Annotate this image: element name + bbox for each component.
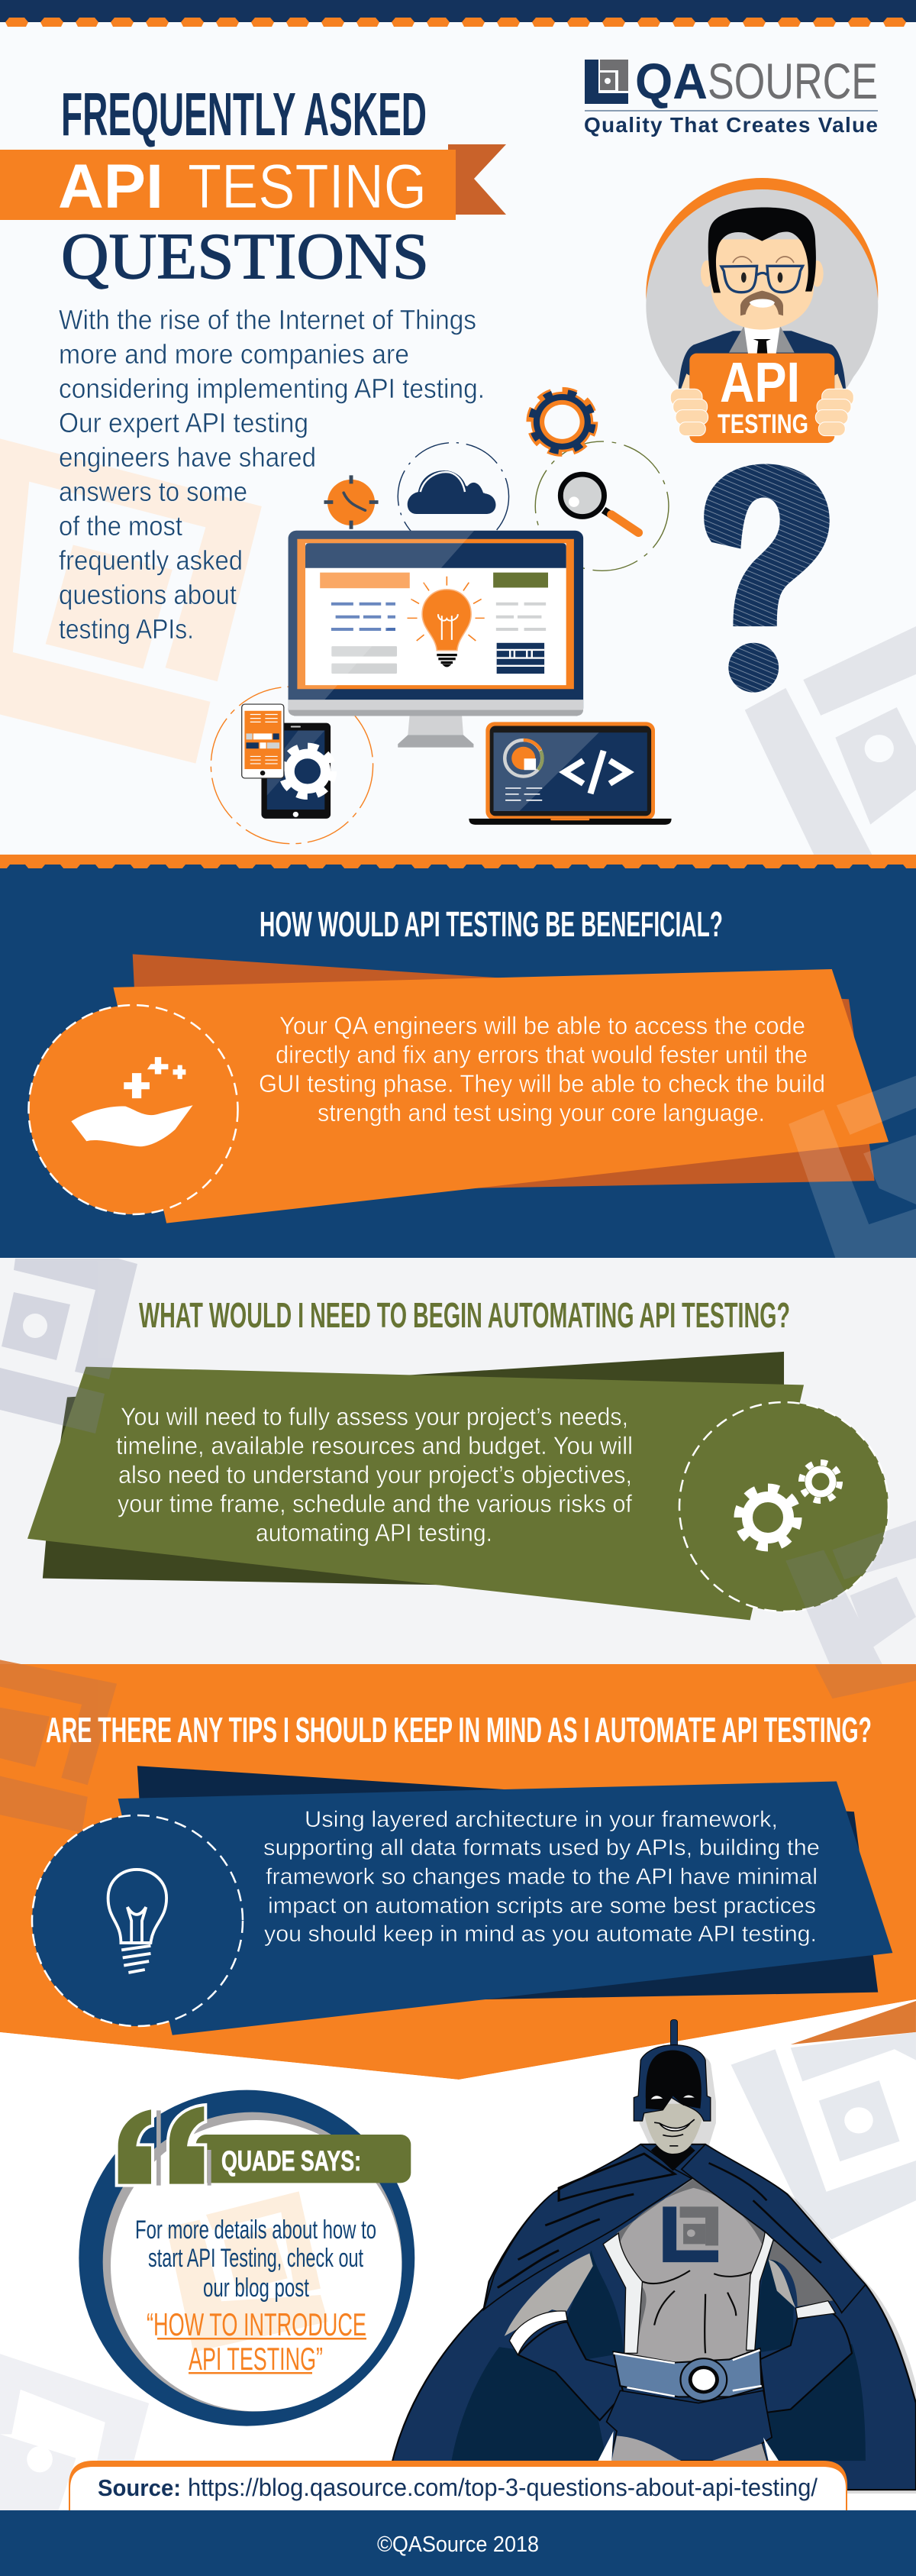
answer text: impact on automation scripts are some best practices	[268, 1893, 816, 1918]
intro text: testing APIs.	[59, 613, 194, 645]
callout body text: For more details about how to	[135, 2216, 376, 2245]
source bar	[69, 2461, 847, 2510]
scalloped orange strip	[0, 855, 916, 868]
section: automation tips	[0, 1660, 916, 2513]
intro text: Our expert API testing	[59, 407, 308, 438]
ribbon back	[133, 954, 875, 1188]
left glove	[518, 2322, 624, 2420]
navy ring	[79, 2090, 414, 2426]
screen reflection	[289, 531, 474, 700]
intro text: answers to some	[59, 476, 247, 507]
callout: Quade says	[79, 2090, 414, 2426]
intro text: engineers have shared	[59, 441, 316, 473]
decorative peach logo mark	[0, 438, 262, 764]
section: API testing benefits	[0, 855, 916, 1258]
blog post link: API TESTING”	[189, 2341, 323, 2377]
decorative grey logo mark, hero background	[731, 2032, 916, 2239]
code symbol	[565, 761, 628, 784]
title line 1: FREQUENTLY ASKED	[61, 80, 427, 148]
chest logo	[663, 2206, 718, 2262]
peach logo mark	[166, 2191, 328, 2352]
cape shadow	[398, 2050, 916, 2494]
ribbon front	[118, 1782, 892, 2035]
eyes	[741, 273, 747, 283]
right cape drape	[682, 2145, 866, 2313]
quote marks	[117, 2105, 205, 2186]
title line 2: API	[58, 152, 163, 221]
table	[497, 643, 544, 674]
eyebrows	[733, 257, 752, 263]
intro text	[59, 304, 485, 645]
cape	[387, 2145, 916, 2490]
answer text: you should keep in mind as you automate API testing.	[264, 1921, 817, 1947]
grey inner shadow	[103, 2112, 402, 2412]
white circle	[111, 2120, 402, 2411]
answer text: You will need to fully assess your project’s needs,	[121, 1403, 628, 1430]
section: begin automating	[0, 1258, 916, 1664]
laptop chart	[505, 740, 542, 777]
callout body text: start API Testing, check out	[148, 2244, 363, 2273]
title line 3: QUESTIONS	[61, 219, 429, 293]
face	[711, 239, 814, 330]
devices illustration	[211, 392, 672, 844]
icon circle: caring hand	[29, 1005, 238, 1214]
ears	[701, 260, 713, 287]
intro text: frequently asked	[59, 545, 243, 576]
ribbon back	[137, 1766, 878, 1999]
intro text: questions about	[59, 579, 237, 610]
callout label text: QUADE SAYS:	[221, 2145, 361, 2177]
tablet gear	[289, 754, 326, 789]
grey circle	[646, 189, 878, 422]
answer text: automating API testing.	[256, 1519, 492, 1547]
logo mark	[585, 60, 628, 104]
callout body text: our blog post	[203, 2274, 309, 2303]
green label	[196, 2135, 411, 2183]
character holding API testing sign	[641, 178, 885, 451]
title	[0, 80, 506, 293]
white lower background	[0, 1999, 916, 2513]
icon: phone	[242, 704, 284, 778]
answer text: GUI testing phase. They will be able to check the build	[259, 1070, 825, 1097]
callout body text	[135, 2216, 376, 2303]
torso	[617, 2178, 773, 2369]
icon: gear	[531, 392, 593, 452]
monitor stand	[398, 714, 473, 748]
right hand	[815, 389, 853, 436]
decorative grey logo mark	[745, 626, 916, 863]
sign text: API	[720, 351, 800, 414]
answer text	[116, 1403, 633, 1547]
suit	[678, 331, 846, 392]
logo: QASource	[584, 53, 878, 137]
icon: question mark	[704, 464, 830, 693]
answer text: supporting all data formats used by APIs, building the	[263, 1835, 820, 1860]
sign	[689, 354, 834, 443]
copyright: ©QASource 2018	[377, 2532, 539, 2557]
answer text	[263, 1807, 820, 1947]
decorative grey logo mark, lower right	[785, 1521, 916, 1664]
source URL: https://blog.qasource.com/top-3-questions-about-api-testing/	[188, 2474, 818, 2501]
light background	[0, 1258, 916, 1664]
icon: cloud	[408, 470, 495, 514]
hole in logo mark	[23, 1314, 47, 1338]
blog post link	[147, 2306, 366, 2377]
chest lines	[642, 2271, 751, 2353]
icon: clock	[324, 475, 379, 529]
left cape drape	[484, 2145, 692, 2309]
neck shadow	[651, 2145, 695, 2170]
decorative grey logo mark, lower left	[0, 2354, 149, 2510]
left arm	[505, 2254, 593, 2336]
cape inner shadow	[452, 2344, 866, 2461]
top navy border with orange dashes	[0, 0, 916, 31]
answer text: Using layered architecture in your framework,	[305, 1807, 778, 1832]
right glove	[760, 2313, 852, 2413]
ribbon back	[43, 1352, 784, 1590]
answer text: directly and fix any errors that would fester until the	[276, 1041, 808, 1068]
icon: magnifier	[560, 474, 638, 532]
blog post link: “HOW TO INTRODUCE	[147, 2306, 366, 2342]
footer	[0, 2510, 916, 2576]
intro text: considering implementing API testing.	[59, 373, 485, 404]
intro text: more and more companies are	[59, 338, 409, 370]
answer text: strength and test using your core language.	[318, 1099, 765, 1126]
left hand	[670, 389, 708, 436]
ribbon front	[27, 1367, 804, 1620]
ribbon tail	[448, 144, 506, 215]
white suit stripes	[603, 2232, 773, 2353]
trunks	[607, 2390, 772, 2461]
torso inner area	[566, 2251, 624, 2359]
light bulb	[407, 577, 485, 667]
intro text: of the most	[59, 510, 182, 541]
glasses	[721, 266, 803, 293]
logo tagline: Quality That Creates Value	[584, 113, 878, 137]
source label: Source:	[98, 2474, 181, 2501]
left wrist band	[509, 2311, 567, 2355]
title: TESTING	[188, 152, 427, 221]
right wrist band	[795, 2301, 836, 2319]
mustache and smile	[740, 291, 783, 315]
answer text: Your QA engineers will be able to access the code	[279, 1012, 805, 1039]
answer text	[259, 1012, 825, 1126]
hair	[708, 207, 816, 293]
decorative overlay logo mark	[789, 1076, 916, 1258]
decorative logo mark on orange	[0, 1660, 916, 1833]
quote shadows	[156, 2110, 211, 2186]
decorative triangle on orange	[791, 2001, 916, 2044]
superhero Quade	[387, 2019, 916, 2494]
monitor	[289, 531, 583, 716]
right arm	[769, 2241, 835, 2306]
orange arc	[646, 178, 878, 410]
answer text: timeline, available resources and budget. You will	[116, 1432, 633, 1459]
icon: tablet with gear	[261, 723, 333, 819]
head	[634, 2019, 711, 2154]
belt	[614, 2348, 762, 2401]
answer text: your time frame, schedule and the various risks of	[118, 1490, 632, 1517]
dashed circles	[211, 441, 669, 844]
orange background	[0, 1664, 916, 2080]
icon circle: gears	[679, 1402, 889, 1611]
icon: laptop	[469, 722, 672, 825]
ribbon front	[113, 969, 889, 1223]
navy background	[0, 855, 916, 1258]
answer text: also need to understand your project’s objectives,	[118, 1461, 632, 1488]
thumbs	[680, 373, 689, 392]
background: top section	[0, 0, 916, 855]
character holding API testing sign: TESTING	[718, 409, 808, 439]
grey text lines	[496, 604, 546, 629]
decorative grey logo mark, upper left	[0, 1259, 137, 1433]
answer text: framework so changes made to the API have minimal	[266, 1864, 818, 1889]
icon circle: light bulb	[32, 1815, 243, 2026]
intro text: With the rise of the Internet of Things	[59, 304, 476, 335]
logo wordmark: QA	[635, 53, 708, 109]
blue text lines	[331, 604, 395, 629]
orange banner	[0, 150, 456, 220]
